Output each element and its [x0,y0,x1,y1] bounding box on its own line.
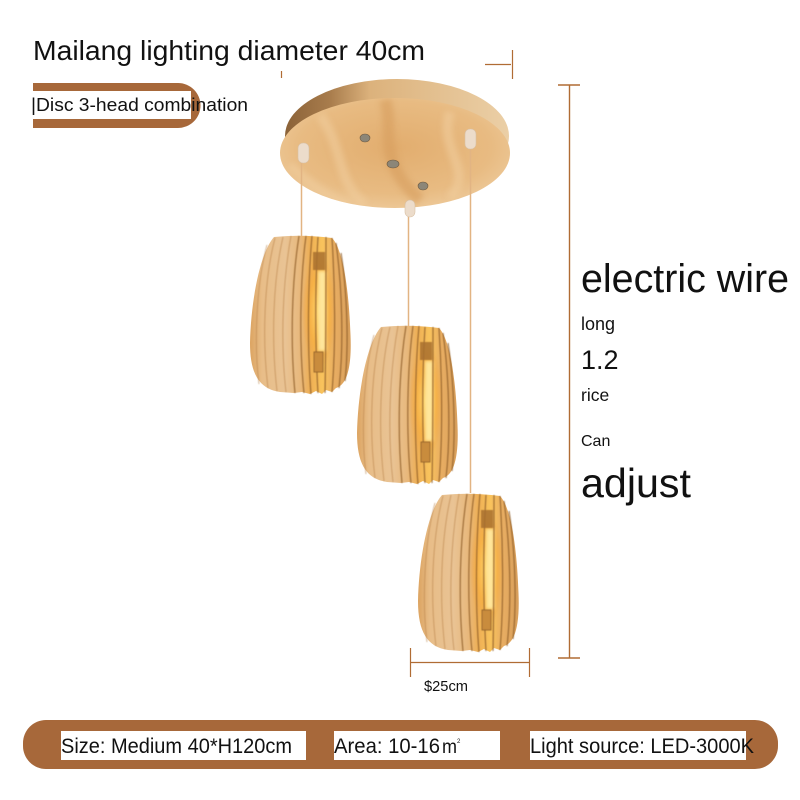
spec: size: Size: Medium 40*H120cm [61,735,292,758]
subtitle pill: disc 3-head combination: |Disc 3-head combination [31,95,248,115]
wire length annotation: 1.2 [581,345,619,375]
spec bar [23,720,778,769]
lamp 1 [250,236,351,394]
spec: area: 2 [457,739,461,745]
wire length annotation: Can [581,433,610,450]
lamp diameter label: $25cm [424,678,468,695]
spec: light source: Light source: LED-3000K [530,735,754,758]
dimension: lamp diameter [410,648,530,677]
spec: area [334,731,500,760]
wire length annotation: electric wire [581,257,789,301]
wire length annotation: rice [581,385,609,405]
wire plugs [298,129,476,217]
dimension: wire length [558,85,580,658]
wire length annotation: long [581,314,615,334]
ceiling disc [280,79,510,208]
subtitle pill: disc 3-head combination [31,83,248,128]
pendant wires [302,146,470,493]
spec: area: Area: 10-16 [334,735,440,758]
wire length annotation: adjust [581,460,692,506]
lamp 2 [357,326,458,484]
wire length annotation [581,257,789,506]
lamp 3 [418,494,519,652]
title: Mailang lighting diameter 40cm [33,35,425,66]
screws [360,134,428,190]
dimension: disc diameter [282,50,512,79]
spec: area: m [442,737,457,758]
